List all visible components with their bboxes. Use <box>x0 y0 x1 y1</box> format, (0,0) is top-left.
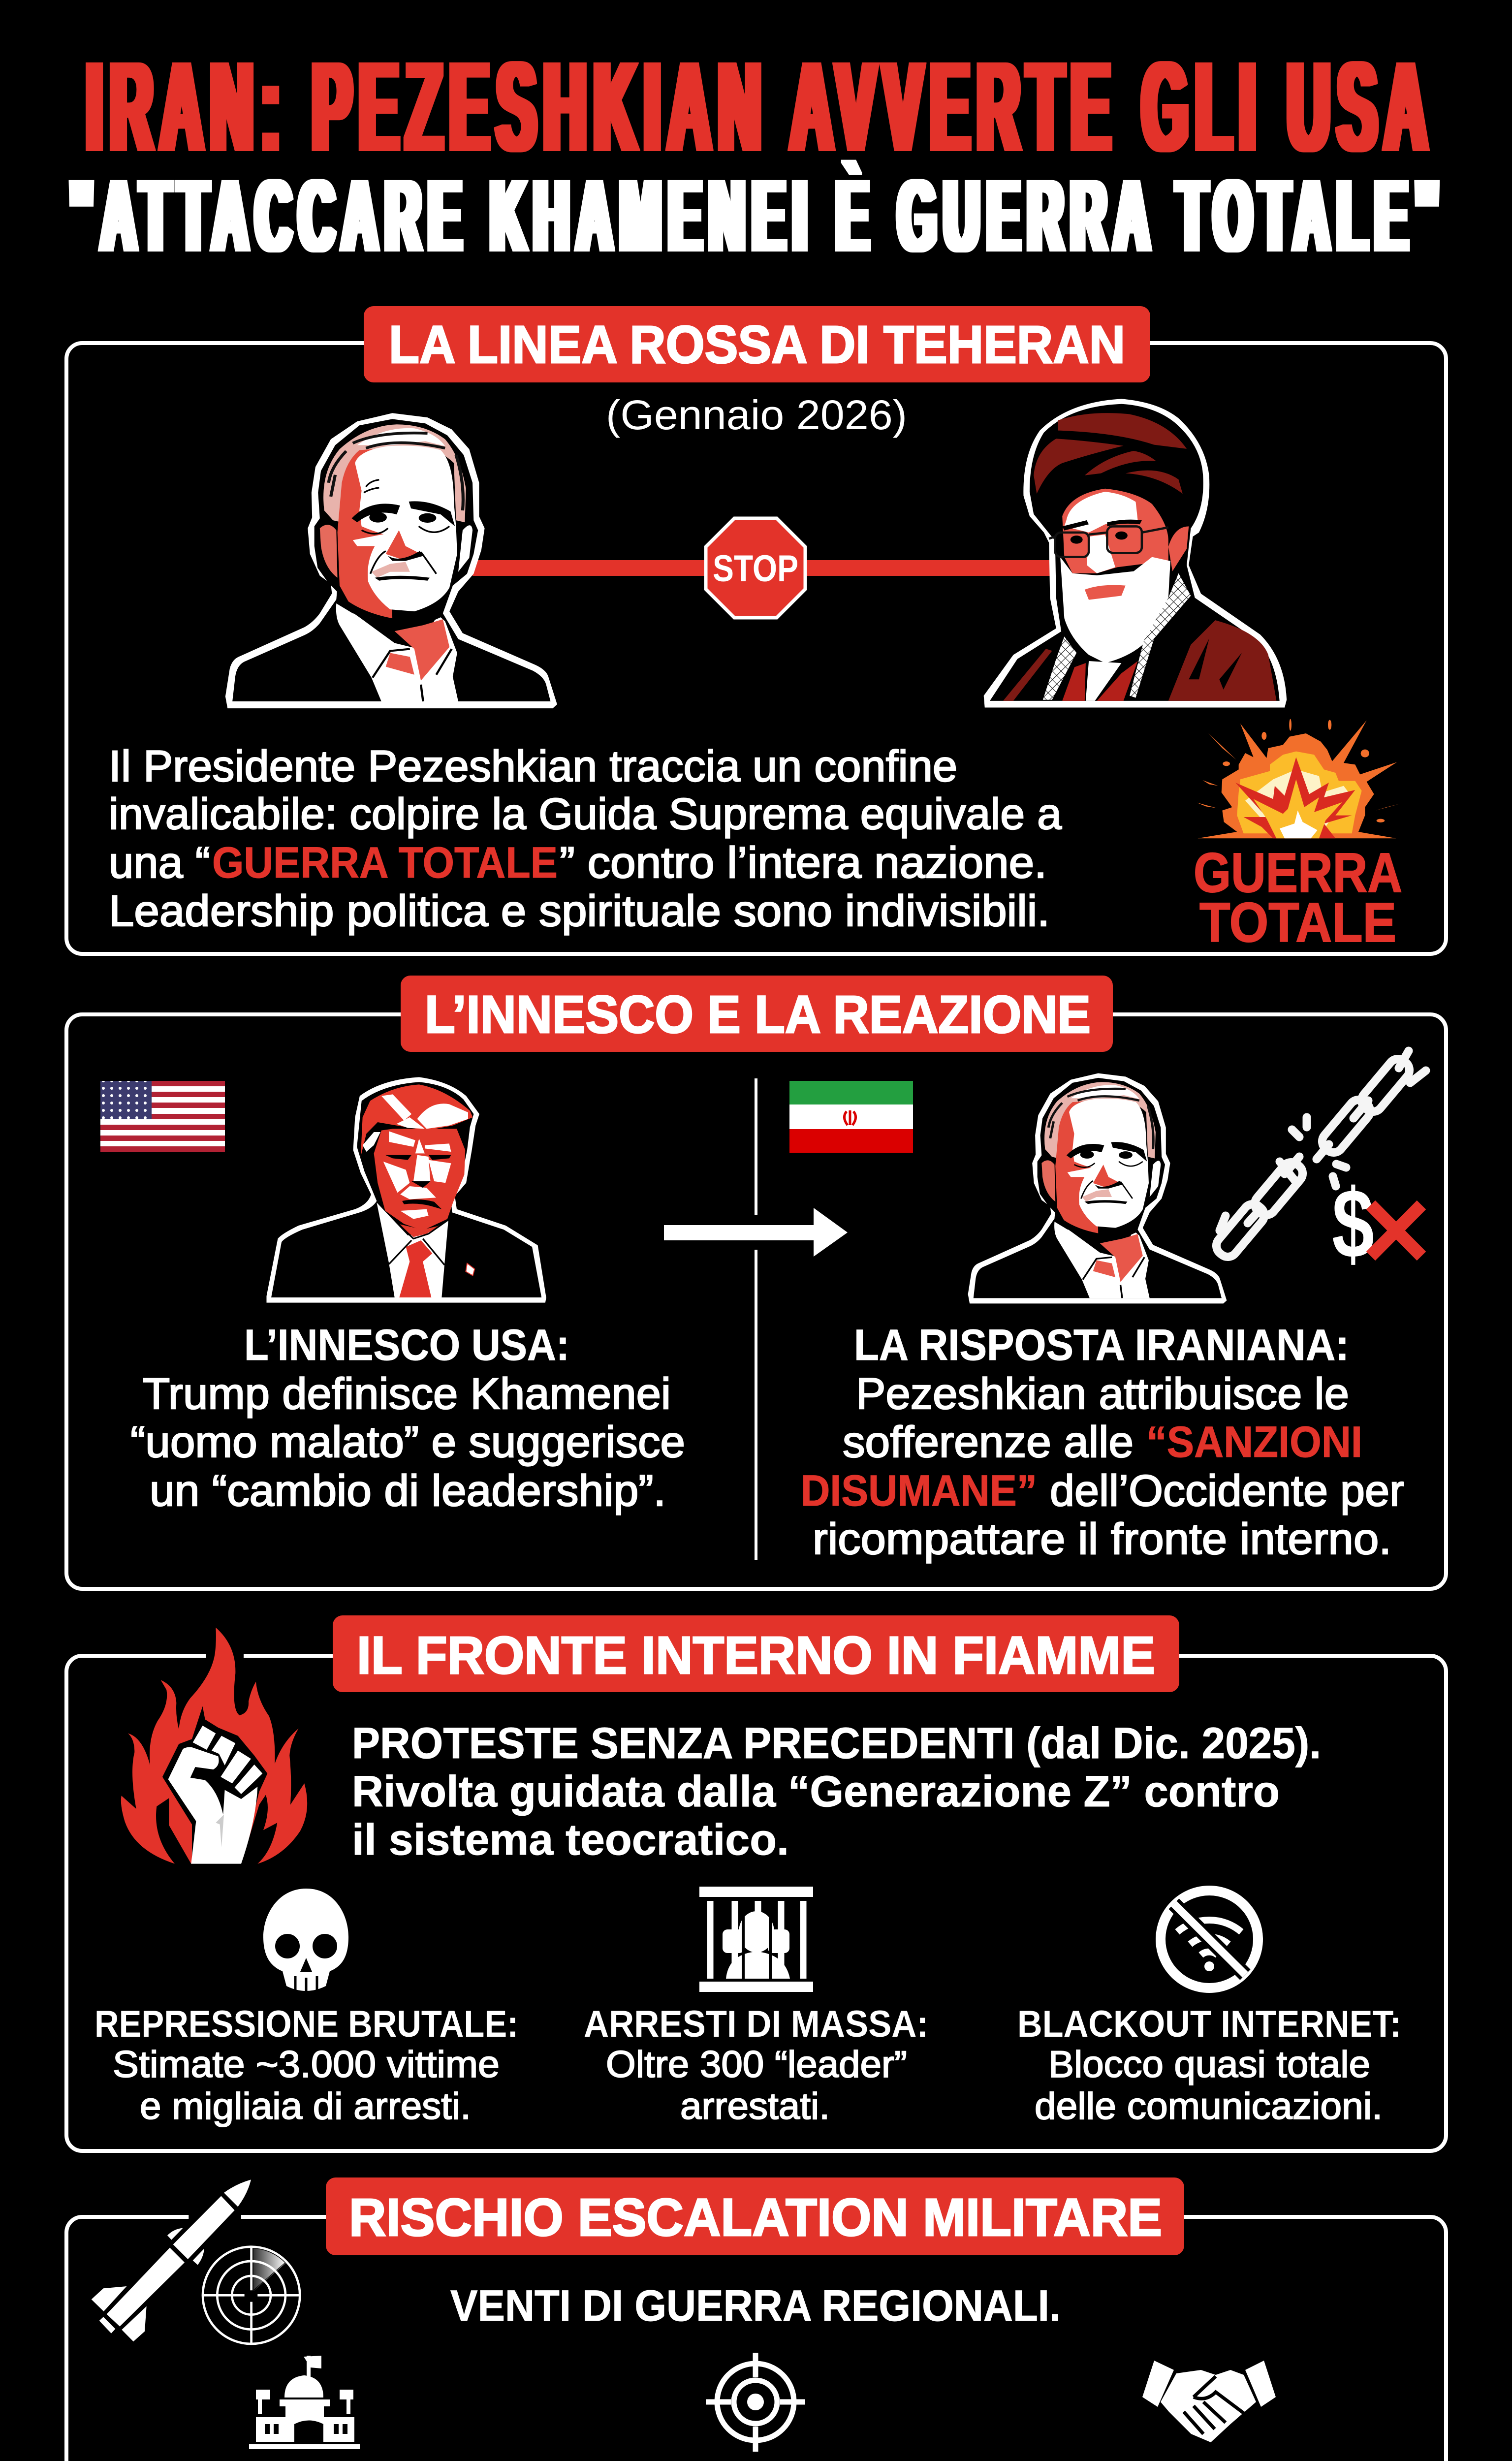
text: venti di guerra: VENTI DI GUERRA REGIONALI. <box>450 2281 1061 2330</box>
panel: rischio escalation militare <box>66 2177 1446 2461</box>
text: innesco USA: L’INNESCO USA: <box>244 1320 569 1369</box>
heading banner: RISCHIO ESCALATION MILITARE <box>349 2187 1162 2247</box>
text: blackout internet <box>1017 2003 1401 2127</box>
paragraph: confine invalicabile: Il Presidente Pezeshkian traccia un confine <box>109 741 957 790</box>
icon: jail bars <box>699 1887 813 1992</box>
heading banner: L’INNESCO E LA REAZIONE <box>425 984 1091 1044</box>
portrait: Pezeshkian <box>225 413 557 708</box>
icon: handshake <box>1142 2361 1276 2442</box>
stop sign <box>706 518 805 618</box>
icon: missile <box>92 2179 251 2341</box>
text: risposta iraniana: Pezeshkian attribuisce le <box>856 1369 1349 1418</box>
icon: military base <box>249 2356 360 2449</box>
icon: no wifi <box>1161 1891 1258 1988</box>
text: proteste <box>352 1718 1321 1864</box>
flag: USA <box>100 1081 225 1152</box>
date: (Gennaio 2026) <box>606 392 907 438</box>
text: innesco USA: Trump definisce Khamenei <box>143 1369 671 1418</box>
paragraph: confine invalicabile <box>109 741 1062 935</box>
text: risposta iraniana: dell’Occidente per <box>1050 1466 1404 1515</box>
stop sign: STOP <box>713 548 798 590</box>
label: guerra totale: TOTALE <box>1199 891 1396 953</box>
paragraph: confine invalicabile: ” contro l’intera nazione. <box>560 838 1047 887</box>
text: innesco USA: un “cambio di leadership”. <box>150 1466 666 1515</box>
panel: la linea rossa di Teheran <box>66 306 1446 954</box>
portrait: Pezeshkian small <box>968 1073 1227 1303</box>
text: arresti di massa: arrestati. <box>680 2085 830 2127</box>
portrait: Khamenei <box>984 399 1287 708</box>
text: risposta iraniana: DISUMANE” <box>801 1466 1037 1515</box>
label: guerra totale <box>1194 842 1402 953</box>
red line <box>472 560 1056 576</box>
panel: il fronte interno in fiamme <box>66 1615 1446 2151</box>
icon: dollar sign with red cross: $ <box>1332 1169 1374 1279</box>
icon: broken chain <box>1212 1051 1426 1261</box>
text: arresti di massa: ARRESTI DI MASSA: <box>584 2003 928 2045</box>
text: arresti di massa <box>584 2003 928 2127</box>
heading banner: IL FRONTE INTERNO IN FIAMME <box>357 1625 1155 1685</box>
text: proteste: il sistema teocratico. <box>352 1815 789 1864</box>
text: innesco USA <box>130 1320 685 1515</box>
paragraph: confine invalicabile: GUERRA TOTALE <box>212 838 558 887</box>
text: risposta iraniana: sofferenze alle <box>843 1417 1134 1466</box>
arrow <box>664 1208 848 1257</box>
portrait: Trump <box>266 1077 546 1303</box>
paragraph: confine invalicabile: una “ <box>109 838 210 887</box>
text: innesco USA: “uomo malato” e suggerisce <box>130 1417 685 1466</box>
text: repressione brutale: Stimate ~3.000 vittime <box>113 2044 500 2085</box>
heading banner: LA LINEA ROSSA DI TEHERAN <box>389 315 1125 374</box>
text: blackout internet: delle comunicazioni. <box>1035 2085 1383 2127</box>
icon: radar <box>203 2246 300 2344</box>
text: risposta iraniana: ricompattare il fronte interno. <box>813 1514 1391 1563</box>
icon: target <box>706 2353 805 2452</box>
text: risposta iraniana: “SANZIONI <box>1146 1417 1362 1466</box>
text: repressione brutale: e migliaia di arresti. <box>140 2085 471 2127</box>
text: risposta iraniana: LA RISPOSTA IRANIANA: <box>854 1320 1349 1369</box>
icon: fist in flames <box>121 1628 307 1865</box>
title <box>70 35 1447 273</box>
icon: skull <box>263 1889 348 1991</box>
panel: l'innesco e la reazione <box>66 976 1446 1589</box>
divider <box>755 1078 757 1560</box>
icon: dollar sign with red cross <box>1332 1169 1421 1279</box>
label: guerra totale: GUERRA <box>1194 842 1402 904</box>
paragraph: confine invalicabile: invalicabile: colpire la Guida Suprema equivale a <box>109 789 1062 838</box>
text: proteste: PROTESTE SENZA PRECEDENTI (dal Dic. 2025). <box>352 1718 1321 1767</box>
text: blackout internet: Blocco quasi totale <box>1048 2044 1370 2085</box>
text: arresti di massa: Oltre 300 “leader” <box>606 2044 907 2085</box>
text: repressione brutale <box>94 2003 518 2127</box>
text: proteste: Rivolta guidata dalla “Generazione Z” contro <box>352 1767 1280 1816</box>
icon: explosion <box>1197 719 1399 838</box>
flag: Iran <box>789 1081 913 1153</box>
text: blackout internet: BLACKOUT INTERNET: <box>1017 2003 1401 2045</box>
text: risposta iraniana <box>801 1320 1404 1563</box>
text: repressione brutale: REPRESSIONE BRUTALE: <box>94 2003 518 2045</box>
paragraph: confine invalicabile: Leadership politica e spirituale sono indivisibili. <box>109 886 1050 935</box>
